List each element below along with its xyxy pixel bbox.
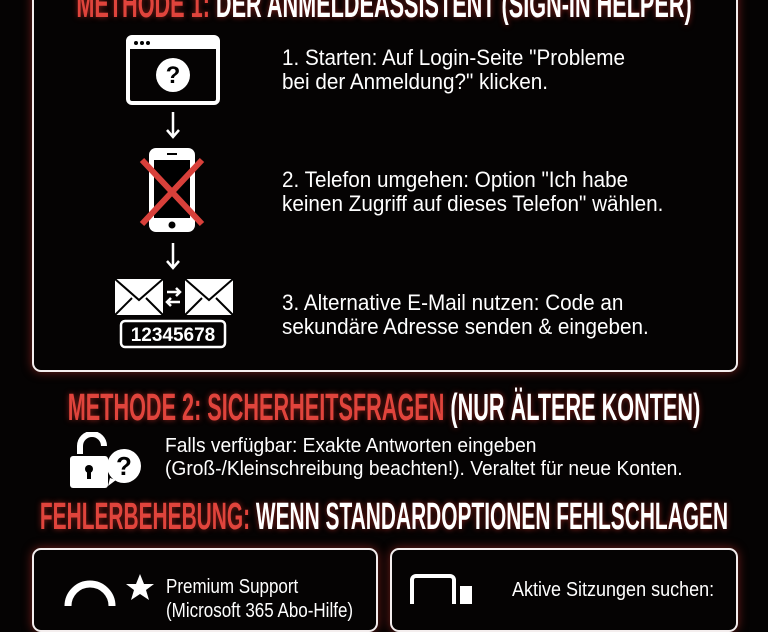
text: step 3: 3. Alternative E-Mail nutzen: Code an — [282, 290, 623, 315]
icon: lock with question — [70, 432, 141, 488]
text: step 2: 2. Telefon umgehen: Option "Ich habe — [282, 167, 628, 192]
text: methode 2: (Groß-/Kleinschreibung beachten!). Veraltet für neue Konten. — [165, 458, 683, 480]
arrow 1 — [166, 112, 180, 139]
icon: browser window with question: ? — [166, 62, 180, 89]
heading: fehlerbehebung: FEHLERBEHEBUNG: WENN STANDARDOPTIONEN FEHLSCHLAGEN — [40, 496, 728, 538]
text: step 2: keinen Zugriff auf dieses Telefon" wählen. — [282, 191, 663, 216]
text: methode 2 — [165, 435, 683, 480]
text: step 1: 1. Starten: Auf Login-Seite "Probleme — [282, 45, 625, 70]
panel: premium support — [32, 548, 378, 632]
text: step 1: bei der Anmeldung?" klicken. — [282, 69, 548, 94]
text: premium support: Premium Support — [166, 576, 298, 598]
text: active sessions: Aktive Sitzungen suchen: — [512, 579, 714, 601]
text: step 1 — [282, 45, 625, 94]
icon: phone crossed — [140, 148, 204, 232]
text: premium support: (Microsoft 365 Abo-Hilfe) — [166, 600, 353, 622]
text: step 3 — [282, 290, 649, 339]
text: step 3: sekundäre Adresse senden & eingeben. — [282, 314, 649, 339]
panel: active sessions — [390, 548, 738, 632]
icon: emails with code: 12345678 — [131, 325, 215, 346]
icon: browser window with question — [126, 35, 220, 105]
text: premium support — [166, 576, 353, 622]
text: methode 2: Falls verfügbar: Exakte Antworten eingeben — [165, 435, 536, 457]
heading: methode 2: METHODE 2: SICHERHEITSFRAGEN (NUR ÄLTERE KONTEN) — [68, 387, 700, 429]
icon: emails with code — [115, 279, 233, 348]
icon: tablet — [410, 574, 472, 604]
panel: methode 1 — [32, 0, 738, 372]
arrow 2 — [166, 243, 180, 270]
text: step 2 — [282, 167, 663, 216]
icon: lock with question: ? — [116, 451, 132, 481]
icon: support headset — [64, 574, 154, 606]
